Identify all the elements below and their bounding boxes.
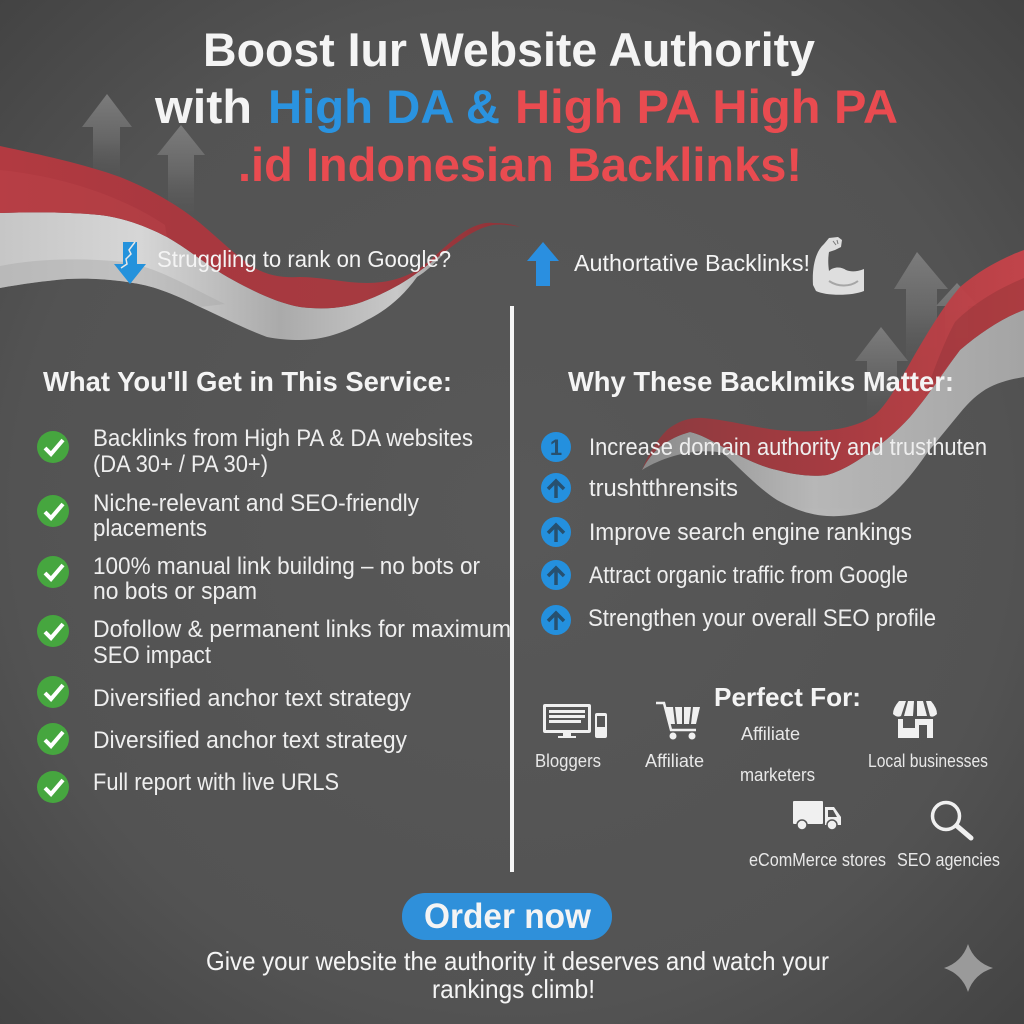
title [154, 23, 898, 191]
icon: storefront [893, 701, 937, 738]
closing text: rankings climb! [432, 974, 595, 1004]
title: .id Indonesian Backlinks! [238, 138, 802, 191]
heading: why these backlinks matter: Why These Backlmiks Matter: [568, 366, 954, 397]
icon: blue down arrow [114, 242, 146, 284]
solution text: Authortative Backlinks! [574, 250, 810, 276]
background arrows right [855, 252, 978, 420]
audience labels: SEO agencies [897, 850, 1000, 870]
icon: delivery truck [793, 801, 841, 830]
benefits list: Strengthen your overall SEO profile [588, 605, 936, 632]
audience labels: marketers [740, 765, 815, 785]
service list: Niche-relevant and SEO-friendly [93, 490, 419, 517]
benefits list: Attract organic traffic from Google [589, 562, 908, 589]
heading: what you'll get: What You'll Get in This Service: [43, 366, 452, 397]
service list: Dofollow & permanent links for maximum [93, 616, 511, 643]
panel: perfect for [535, 682, 1000, 870]
audience labels: Affiliate [741, 724, 800, 744]
flag ribbon right [642, 250, 1024, 516]
benefits list: Increase domain authority and trusthuten [589, 434, 987, 461]
problem text: Struggling to rank on Google? [157, 246, 451, 272]
flag ribbon left [0, 146, 520, 340]
order button [402, 893, 612, 940]
title: with [154, 80, 252, 133]
benefits list: trushtthrensits [589, 475, 738, 502]
check icons [37, 431, 69, 803]
benefits list: Improve search engine rankings [589, 519, 912, 546]
center divider [510, 306, 514, 872]
numbered and arrow bullets [541, 432, 571, 635]
icon: magnifier [932, 802, 971, 838]
icon: sparkle [944, 944, 993, 992]
service list [93, 425, 511, 796]
closing text: Give your website the authority it deserves and watch your [206, 946, 829, 976]
service list: Diversified anchor text strategy [93, 685, 411, 712]
order button: Order now [424, 897, 592, 936]
service list: (DA 30+ / PA 30+) [93, 451, 268, 478]
background arrows left [82, 94, 205, 222]
title: High PA High PA [515, 80, 898, 133]
icon: blue up arrow [527, 242, 559, 286]
title: Boost Iur Website Authority [203, 23, 815, 76]
icon: flexed bicep [813, 237, 864, 295]
audience labels: Bloggers [535, 751, 601, 771]
service list: Backlinks from High PA & DA websites [93, 425, 473, 452]
title: High DA & [268, 80, 500, 133]
benefits list [588, 434, 987, 632]
numbered and arrow bullets: 1 [550, 435, 562, 460]
service list: Full report with live URLS [93, 769, 339, 796]
service list: placements [93, 515, 207, 542]
panel: what you'll get [37, 366, 511, 803]
icon: shopping cart [656, 703, 700, 740]
service list: no bots or spam [93, 578, 257, 605]
icon: desktop and phone [543, 704, 607, 738]
panel: why these backlinks matter [541, 366, 987, 635]
service list: Diversified anchor text strategy [93, 727, 407, 754]
audience labels [535, 724, 1000, 870]
audience labels: Local businesses [868, 751, 988, 771]
closing text [206, 946, 829, 1004]
audience labels: Affiliate [645, 751, 704, 771]
service list: SEO impact [93, 642, 211, 669]
audience labels: eComMerce stores [749, 850, 886, 870]
heading: perfect for: Perfect For: [714, 682, 861, 712]
service list: 100% manual link building – no bots or [93, 553, 480, 580]
